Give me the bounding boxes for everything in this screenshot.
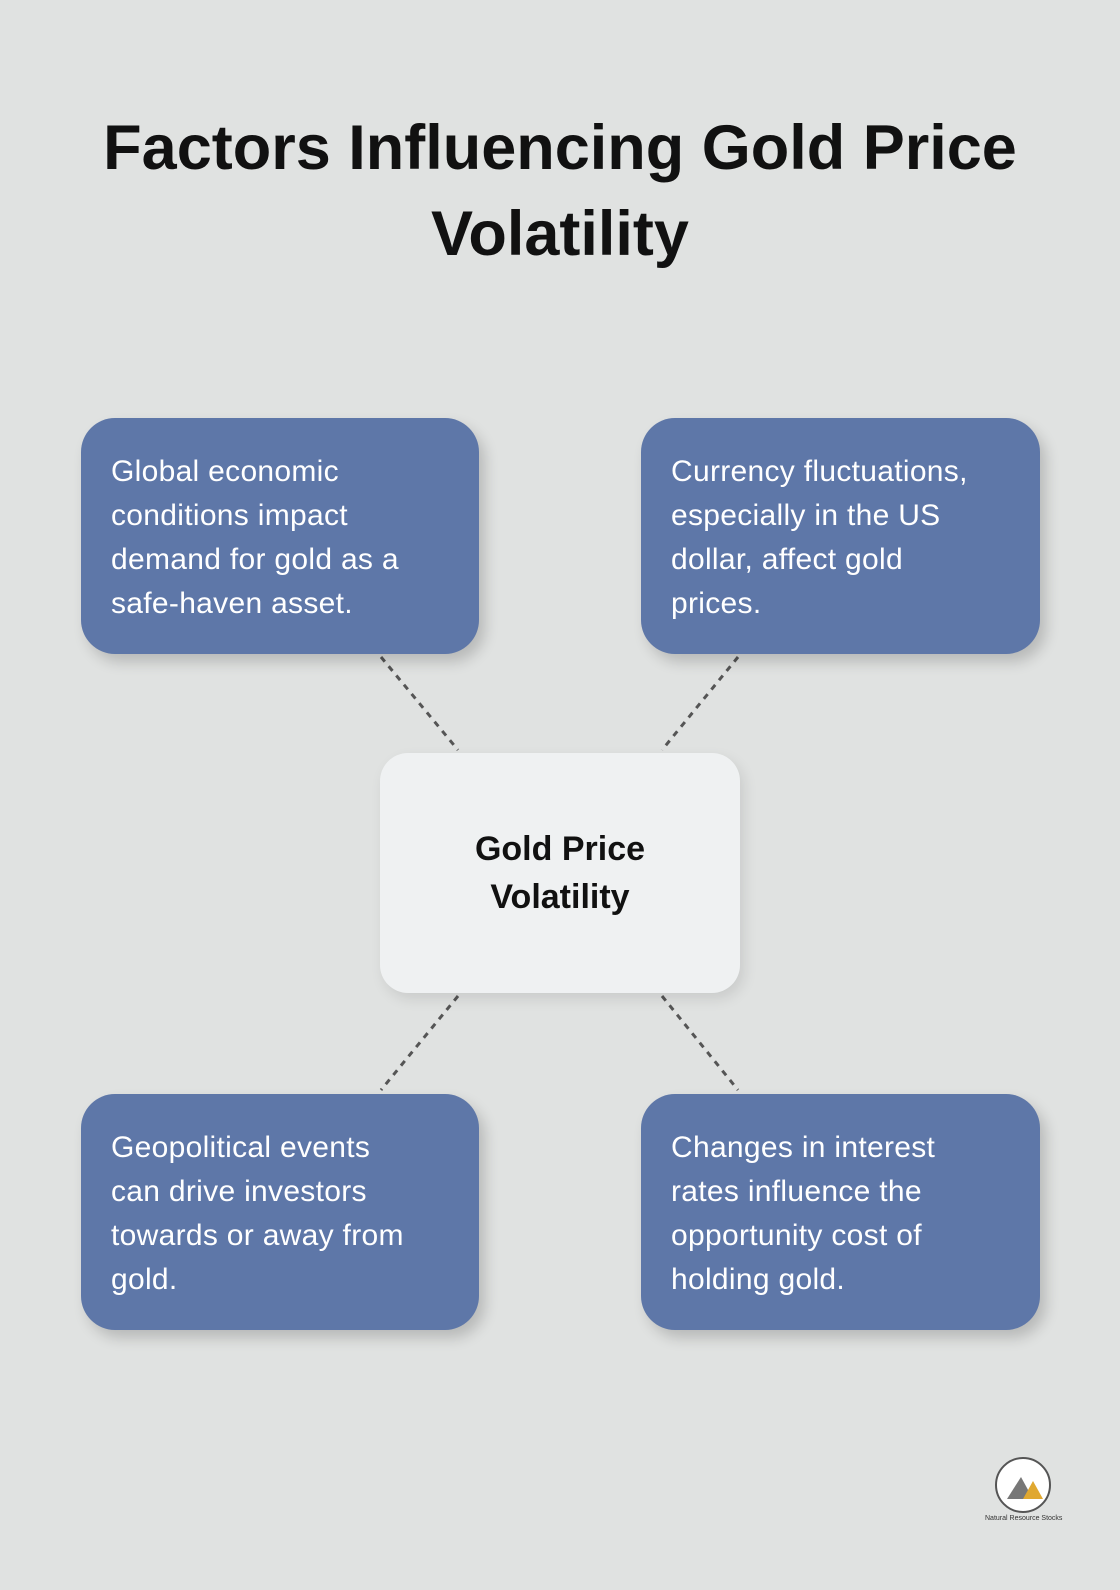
panel: global economic: demand for gold as a [111,543,399,576]
panel: currency [641,418,1040,654]
icon: logo [985,1457,1062,1522]
panel: interest rates [641,1094,1040,1330]
panel: geopolitical: gold. [111,1263,178,1296]
panel: global economic: safe-haven asset. [111,587,353,620]
panel: global economic [81,418,479,654]
panel: currency: Currency fluctuations, [671,455,968,488]
panel: center [380,753,740,993]
panel: geopolitical: can drive investors [111,1175,367,1208]
panel: center: Gold Price [475,830,645,868]
panel: geopolitical: Geopolitical events [111,1131,370,1164]
title [103,113,1017,269]
panel: currency: dollar, affect gold [671,543,903,576]
panel: global economic: Global economic [111,455,339,488]
panel: interest rates: holding gold. [671,1263,845,1296]
panel: interest rates: Changes in interest [671,1131,935,1164]
title: Volatility [431,199,689,269]
icon: logo: Natural Resource Stocks [985,1515,1062,1522]
title: Factors Influencing Gold Price [103,113,1017,183]
panel: interest rates: rates influence the [671,1175,922,1208]
panel: center: Volatility [490,878,630,916]
panel: interest rates: opportunity cost of [671,1219,922,1252]
panel: currency: especially in the US [671,499,940,532]
panel: geopolitical: towards or away from [111,1219,404,1252]
panel: geopolitical [81,1094,479,1330]
panel: currency: prices. [671,587,761,620]
panel: global economic: conditions impact [111,499,348,532]
